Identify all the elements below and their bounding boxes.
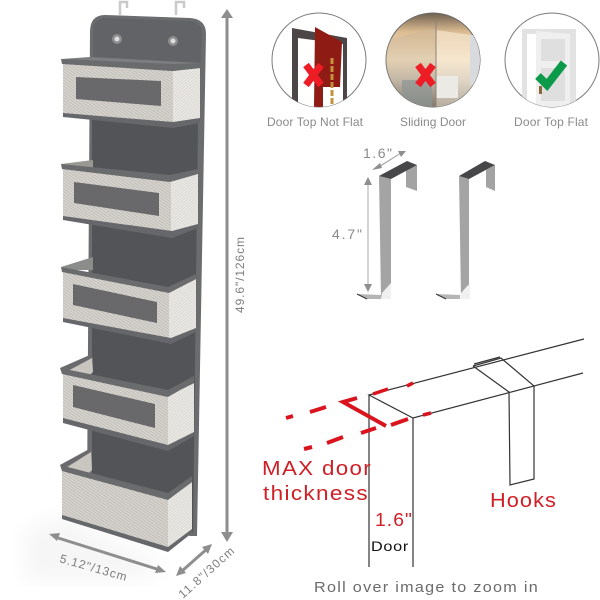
hook diagram 1 bbox=[357, 161, 417, 299]
organizer product bbox=[60, 2, 206, 552]
icon: red cross bbox=[418, 65, 433, 85]
width arrow and label bbox=[49, 533, 166, 584]
icon: green check bbox=[538, 63, 564, 85]
label: max door thickness: MAX door bbox=[262, 458, 372, 480]
drawer 3 bbox=[61, 257, 196, 344]
label: door: Door bbox=[371, 538, 409, 554]
drawer 5 bbox=[60, 448, 192, 552]
label: hooks: Hooks bbox=[490, 490, 557, 512]
panel buttons bbox=[112, 34, 178, 46]
back panel bbox=[87, 15, 206, 536]
red thickness marks bbox=[286, 383, 431, 449]
height arrow and label bbox=[221, 9, 247, 542]
label: 1.6 inch: 1.6" bbox=[375, 510, 413, 530]
label: sliding door: Sliding Door bbox=[400, 115, 466, 129]
hook height dimension bbox=[332, 177, 372, 292]
label: door top flat: Door Top Flat bbox=[514, 115, 589, 129]
icon: white door bbox=[522, 29, 576, 109]
drawer 2 bbox=[61, 160, 198, 238]
label: max door thickness: thickness bbox=[263, 483, 369, 505]
hook width dimension: 1.6" bbox=[363, 145, 392, 161]
label: max door thickness bbox=[262, 458, 372, 505]
door outline bbox=[369, 339, 584, 567]
hook width dimension bbox=[363, 145, 406, 170]
label: door top not flat: Door Top Not Flat bbox=[267, 115, 364, 129]
circle: door top flat bbox=[505, 13, 599, 109]
icon: red cross bbox=[306, 65, 321, 85]
drawer 4 bbox=[60, 354, 194, 451]
icon: red door bbox=[292, 27, 347, 107]
icon: glass room bbox=[386, 20, 480, 107]
width arrow and label: 5.12"/13cm bbox=[58, 551, 128, 584]
caption: Roll over image to zoom in bbox=[314, 579, 539, 596]
hook height dimension: 4.7" bbox=[332, 226, 362, 242]
circle: sliding door bbox=[386, 13, 480, 107]
circle: door top not flat bbox=[272, 13, 366, 107]
depth arrow and label: 11.8"/30cm bbox=[176, 544, 237, 600]
door diagram bbox=[286, 339, 584, 567]
hook diagram 2 bbox=[436, 161, 495, 299]
height arrow and label: 49.6"/126cm bbox=[233, 237, 247, 313]
door hooks on top of organizer bbox=[120, 2, 184, 15]
drawer 1 bbox=[61, 57, 201, 128]
